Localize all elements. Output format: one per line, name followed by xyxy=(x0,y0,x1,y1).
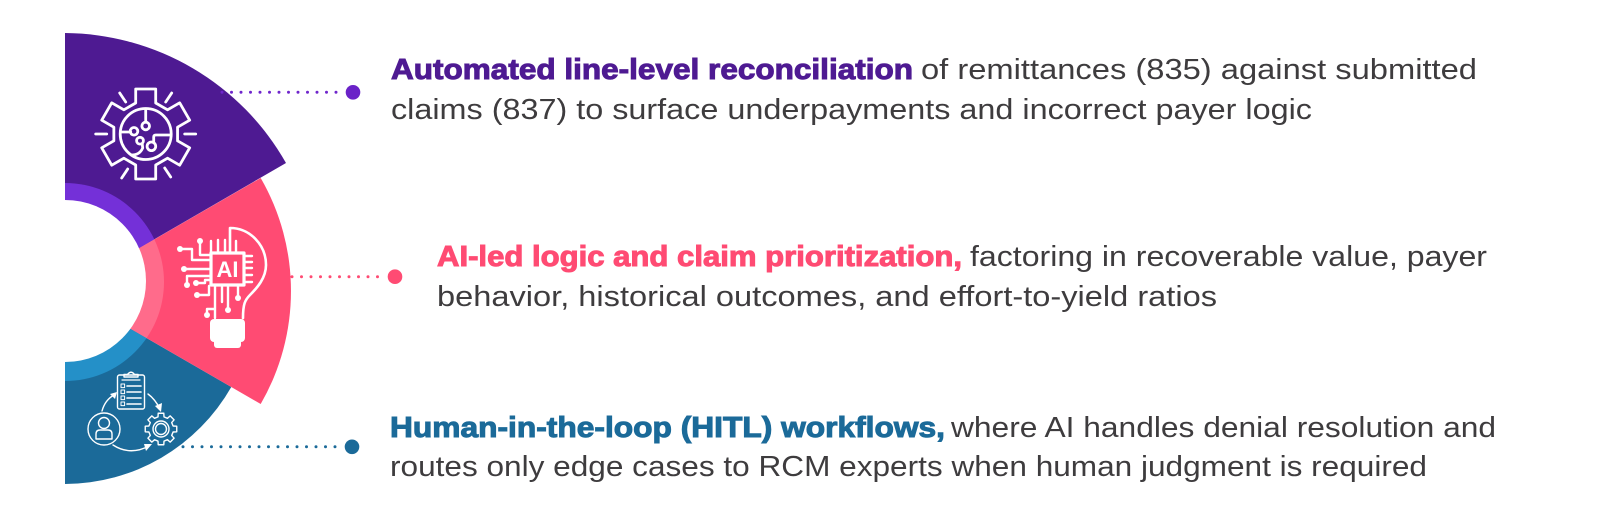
panel: segmented semicircle wheel xyxy=(65,33,291,484)
text block: AI-led prioritization: behavior, historical outcomes, and effort-to-yield ratios xyxy=(437,281,1217,313)
icon: AI chip light bulb xyxy=(177,228,266,348)
inner ring: pink xyxy=(130,239,164,338)
text block: human-in-the-loop: Human-in-the-loop (HITL) workflows, xyxy=(390,412,945,444)
inner ring: blue xyxy=(65,328,146,381)
connector: pink dotted line xyxy=(292,269,402,284)
text block: automated reconciliation: of remittances (835) against submitted xyxy=(921,54,1477,86)
text block: human-in-the-loop: where AI handles denial resolution and xyxy=(950,412,1496,444)
text block: AI-led prioritization xyxy=(437,241,1488,313)
connector: purple dotted line xyxy=(222,85,360,100)
segment: blue xyxy=(65,291,231,484)
text block: AI-led prioritization: factoring in recoverable value, payer xyxy=(970,241,1488,273)
connector: blue dotted line xyxy=(183,440,359,454)
text block: human-in-the-loop: routes only edge cases to RCM experts when human judgment is required xyxy=(390,451,1427,483)
text block: AI-led prioritization: AI-led logic and claim prioritization, xyxy=(437,241,962,273)
text block: automated reconciliation: Automated line-level reconciliation xyxy=(391,54,913,86)
text block: human-in-the-loop xyxy=(390,412,1496,483)
text block: automated reconciliation xyxy=(391,54,1477,126)
icon: gear with circuit xyxy=(96,89,196,179)
inner ring: purple xyxy=(65,183,154,248)
icon: human-in-the-loop cycle xyxy=(88,372,177,451)
text block: automated reconciliation: claims (837) to surface underpayments and incorrect payer logic xyxy=(391,94,1312,126)
centre hole xyxy=(0,200,146,362)
segment: purple xyxy=(65,33,286,291)
segment: pink xyxy=(65,178,291,404)
icon: AI chip light bulb: AI xyxy=(216,257,238,282)
